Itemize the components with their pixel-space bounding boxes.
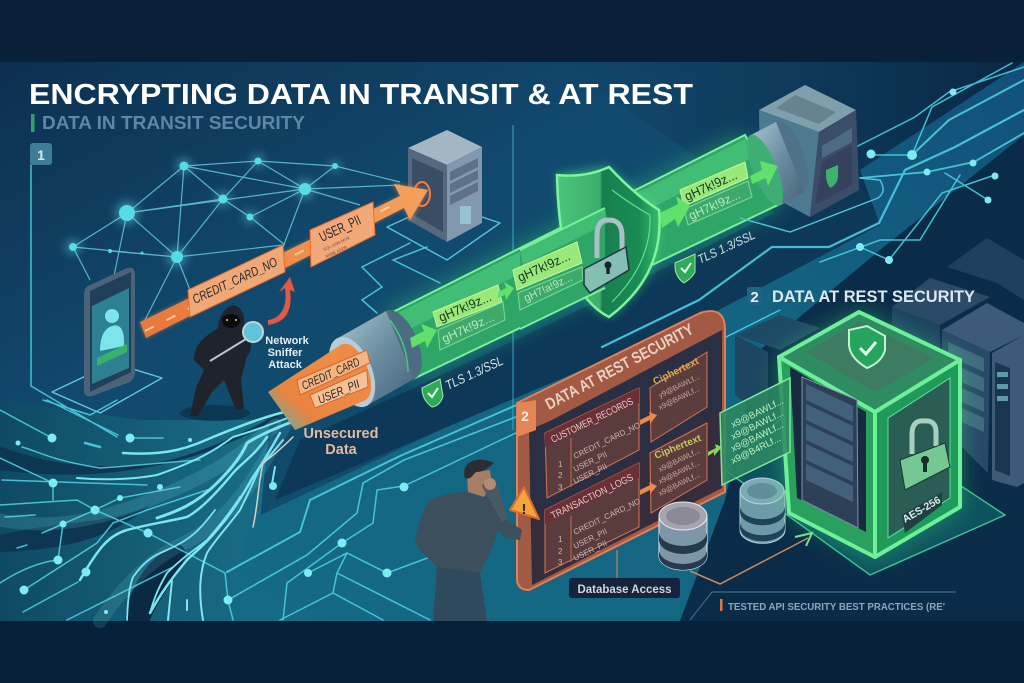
warning triangle: ! <box>522 501 526 518</box>
table: customer records: 2 <box>558 471 563 480</box>
table: customer records: 3 <box>558 483 563 492</box>
ciphertext box 1: Ciphertext <box>651 356 701 388</box>
badge 2: 2 <box>521 408 529 424</box>
label: network sniffer attack: Sniffer <box>268 347 303 359</box>
padlock <box>584 220 629 293</box>
heading: data at rest: 2 <box>750 289 759 306</box>
encrypted chip 1 <box>410 285 505 350</box>
footer note <box>690 592 956 620</box>
database 2 <box>740 478 785 543</box>
badge 1 <box>30 143 52 165</box>
label: aes-256: AES-256 <box>900 494 943 526</box>
label: user_pii: SQL-1234-5678 <box>322 235 351 252</box>
rack inside vault <box>802 377 858 528</box>
network mesh <box>66 155 400 320</box>
label: credit_card_no <box>188 245 285 317</box>
server: unsecured destination <box>387 130 500 260</box>
panel heading: DATA AT REST SECURITY <box>543 321 697 414</box>
label: network sniffer attack: Attack <box>268 359 303 371</box>
shield <box>557 167 660 317</box>
small arrows <box>640 412 722 495</box>
label: network sniffer attack: Network <box>265 335 310 347</box>
ciphertext box 1 <box>650 352 707 442</box>
ciphertext box 1: y9@BAWLf... <box>657 372 701 400</box>
ciphertext box 2: x9@BAWLf... <box>657 470 701 498</box>
grid line <box>512 125 514 430</box>
table: customer records: USER_PII <box>572 450 609 474</box>
label: user_pii tube: USER_PII <box>316 376 362 407</box>
green vault <box>779 312 960 557</box>
shield icon top <box>849 326 885 368</box>
encrypted chip 1: gH7k!9z... <box>440 310 496 346</box>
encrypted chip 2: gH7k!9z... <box>515 248 572 285</box>
tls label 1 <box>422 353 505 407</box>
table: transaction logs: CREDIT_CARD_NO <box>572 497 642 537</box>
encrypted chip 3: gH7k!9z... <box>687 188 742 223</box>
table: customer records <box>545 388 642 498</box>
label: user_pii <box>310 202 375 267</box>
label: unsecured data: Data <box>325 442 358 458</box>
database 1 <box>659 502 707 570</box>
encrypted chip 1: gH7k!9z... <box>436 289 494 325</box>
panel: data at rest <box>517 311 725 590</box>
table: customer records: CUSTOMER_RECORDS <box>549 396 635 446</box>
badge 2 <box>517 400 536 437</box>
ciphertext panel: x9@BAWLf... <box>729 396 785 431</box>
table: customer records: USER_PII <box>572 462 609 486</box>
heading: data at rest: DATA AT REST SECURITY <box>772 288 975 306</box>
label: credit_card: CREDIT_CARD <box>300 355 362 393</box>
table: transaction logs: TRANSACTION_LOGS <box>549 472 635 522</box>
ciphertext panel: x9@B4RLf... <box>729 433 783 467</box>
arrow: unencrypted data path <box>140 183 428 338</box>
ciphertext box 2: x9@BAWLf... <box>657 458 701 486</box>
warning triangle <box>510 487 539 519</box>
connector: database to vault <box>690 533 812 584</box>
hacker figure <box>180 305 263 421</box>
ciphertext panel <box>720 378 790 485</box>
ciphertext box 1: x9@BAWLf... <box>657 384 701 412</box>
label: user_pii: NAME ADDR <box>324 244 348 259</box>
background server racks <box>735 238 1024 487</box>
title: ENCRYPTING DATA IN TRANSIT & AT REST <box>29 79 693 111</box>
phone <box>52 268 162 413</box>
tls label 2 <box>675 228 757 283</box>
encrypted chip 2: gH7!a!9z... <box>522 272 574 305</box>
table: customer records: CREDIT_CARD_NO <box>572 421 642 461</box>
platform under green vault <box>725 410 1005 575</box>
subtitle: data in transit: DATA IN TRANSIT SECURITY <box>42 113 305 133</box>
data stream: unsecured data <box>0 410 297 621</box>
table: transaction logs: 2 <box>558 547 563 556</box>
ciphertext panel: x9@BAWLf... <box>729 420 785 455</box>
ciphertext box 2 <box>650 423 707 513</box>
person worried <box>415 460 522 621</box>
label: database access: Database Access <box>578 582 672 596</box>
curved attack arrow <box>268 277 295 325</box>
tunnel over shield <box>520 208 608 329</box>
table: transaction logs: 3 <box>558 558 563 567</box>
label: credit_card_no: CREDIT_CARD_NO <box>190 254 280 307</box>
badge 1: 1 <box>37 147 45 163</box>
label: user_pii: USER_PII <box>317 212 363 245</box>
encrypted chip 3 <box>660 161 778 228</box>
unsecured tube and collar <box>268 304 431 430</box>
ciphertext panel: x9@BAWLf... <box>729 408 785 443</box>
label: unsecured data: Unsecured <box>304 426 378 442</box>
table: transaction logs <box>545 463 642 573</box>
circuit nodes <box>16 88 998 614</box>
tls label 2: TLS 1.3/SSL <box>695 228 757 267</box>
ciphertext box 2: Ciphertext <box>653 433 704 462</box>
encrypted tunnel <box>385 135 782 378</box>
table: transaction logs: 1 <box>558 535 563 544</box>
table: transaction logs: USER_PII <box>572 539 609 563</box>
server: secured destination <box>740 85 883 232</box>
ciphertext box 2: x9@BAWLf... <box>657 446 701 474</box>
table: customer records: 1 <box>558 460 563 469</box>
vault padlock <box>900 421 950 490</box>
encrypted chip 2 <box>498 242 583 310</box>
label: database access <box>569 550 680 598</box>
tls label 1: TLS 1.3/SSL <box>443 353 505 393</box>
table: transaction logs: USER_PII <box>572 527 609 551</box>
footer note: TESTED API SECURITY BEST PRACTICES (RE' <box>728 601 945 613</box>
encrypted chip 3: gH7k!9z... <box>682 167 739 204</box>
